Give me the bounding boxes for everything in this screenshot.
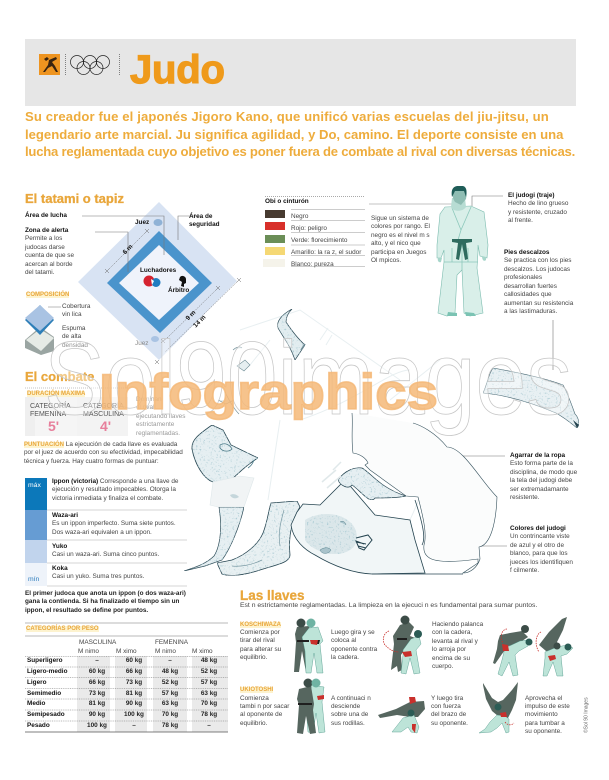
step text: su oponente. [525,728,562,735]
stat: masculina: CATEGORÍA [83,403,124,410]
llaves subtitle: Est n estrictamente reglamentadas. La limpieza en la ejecuci n es fundamental para sumar puntos. [240,602,537,609]
step text: levanta al rival y [432,638,478,645]
weight table: 60 kg [89,668,105,675]
label: juez: Juez [135,219,149,226]
stat: femenina: 5' [48,418,59,434]
step text: lo arroja por [432,646,466,653]
note: judogi: Hecho de lino grueso [508,200,568,207]
duration note: ejecutando llaves [136,413,185,420]
label: 14 m: 14 m [192,314,207,329]
heading: koschiwaza: KOSCHIWAZA [240,622,281,628]
label: area de seguridad: Área de [189,213,212,220]
step text: movimiento [525,711,558,718]
white gi shading [240,310,450,540]
step text: Comienza por [240,629,280,636]
note: colores: jueces los identifiquen [510,559,573,566]
step text: Aprovecha el [525,694,562,702]
belt text: participa en Juegos [371,249,426,256]
weight table: M nimo [78,648,99,655]
intro paragraph: Su creador fue el japonés Jigoro Kano, que unificó varias escuelas del jiu-jitsu, un [25,109,549,124]
weight table: 57 kg [201,679,217,686]
weight table: 81 kg [126,690,142,697]
weight table: Medio [27,700,45,707]
rule note [25,590,186,614]
upper sleeve [278,309,305,360]
step text: Y luego tira [431,694,463,702]
label: max: máx [28,482,41,489]
step text: Haciendo palanca [432,621,483,628]
belt text: colores por rango. El [371,223,430,230]
main judo illustration [184,309,579,575]
label: espuma [62,325,88,349]
puntuacion text: PUNTUACIÓN La ejecución de cada llave es evaluada [24,441,177,448]
score: koka [52,565,144,580]
icon: judo pictogram [39,54,60,75]
weight table: Semimedio [27,690,61,697]
step text [331,629,378,661]
step text: sus rodillas. [331,720,365,727]
grip forearm [338,468,406,500]
step text: con fuerza [431,703,461,710]
watermark: Infographics [99,364,438,420]
white trouser cuff [210,476,254,507]
note: judogi: El judogi (traje) [508,192,555,199]
heading: duracion: DURACIÓN MÁXIMA [27,391,85,397]
belt labels [291,213,362,268]
belt text: alto, y el nico que [371,240,421,247]
stat: femenina: CATEGORÍA [30,403,71,410]
label: zona de alerta [24,227,74,276]
duration note [136,396,186,437]
duration panel [25,388,128,436]
tatami diagram [78,202,241,364]
step text [240,629,281,661]
label: min: mín [28,576,39,583]
label: area de seguridad [189,212,220,228]
score: waza-ari: Dos waza-ari equivalen a un ippon. [52,529,152,536]
step text: para alterar su [240,646,281,653]
credit: ©Sol 90 Images [584,697,590,733]
score: ippon [52,478,178,502]
weight table: Semipesado [27,711,65,718]
belt labels: Negro [291,213,308,220]
heading: el combate: El combate [25,369,94,384]
label: juez lower: Juez [135,340,148,347]
note: agarrar [510,452,577,501]
weight table: – [95,657,99,664]
note: colores: Colores del judogi [510,525,566,532]
label: zona de alerta: Permite a los [25,235,62,242]
composition cubes [25,305,61,355]
label: 9 m: 9 m [185,309,197,322]
note: pies descalzos: a las lastimaduras. [504,308,557,315]
stat: femenina [30,402,71,434]
weight table: 66 kg [126,668,142,675]
label: espuma: densidad [62,342,88,349]
icon: koshiwaza step 1 [294,618,323,673]
step text: del brazo de [431,711,466,718]
stat: masculina: 4' [100,418,111,434]
step text: su oponente. [431,720,468,727]
heading: el tatami: El tatami o tapiz [25,191,124,206]
step text: Comienza [240,694,269,702]
heading: las llaves: Las llaves [240,588,305,603]
step text: encima de su [432,655,470,662]
heading: ukiotoshi: UKIOTOSHI [240,687,273,693]
label: cobertura: vin lica [62,311,82,318]
weight table: 63 kg [201,690,217,697]
belt colours [263,196,452,267]
note: colores [510,525,573,574]
duration note: estrictamente [136,421,174,428]
note: judogi: al frente. [508,217,533,224]
step text: equilibrio. [240,720,267,727]
belt labels: Blanco: pureza [291,261,334,268]
label: espuma: Espuma [62,325,85,332]
weight table: Superligero [27,657,63,664]
knee and thigh [192,425,258,482]
step text: la cadera. [331,654,359,661]
step text: impulso de este [525,703,570,710]
note: pies descalzos [504,249,574,315]
score: ippon: Ippon (victoria) Corresponde a una llave de [52,478,178,485]
step text: con la cadera, [432,629,472,636]
weight table: 52 kg [201,668,217,675]
note: agarrar: Esto forma parte de la [510,460,573,467]
note: pies descalzos: desarrollan fuertes [504,283,557,290]
score: koka: Koka [52,565,68,572]
note: pies descalzos: Pies descalzos [504,249,549,256]
gripping hand [356,535,372,550]
note: pies descalzos: descalzos. Los judocas [504,266,570,273]
step text [432,621,484,670]
belt labels: Rojo: peligro [291,225,327,232]
weight table: 70 kg [162,711,178,718]
title: Judo [130,48,225,92]
belt labels: Amarillo: la ra z, el sudor [291,249,361,256]
label: area de lucha: Área de lucha [25,212,67,219]
front lower leg and foot [217,501,300,575]
weight table: 100 kg [87,722,107,729]
note: colores: Un contrincante viste [510,533,570,540]
weight table: FEMENINA [155,639,188,646]
note: pies descalzos: profesionales [504,274,542,281]
scoring scale [25,478,187,586]
step text: coloca al [331,637,356,644]
intro paragraph [25,109,575,159]
weight table: 60 kg [126,657,142,664]
puntuacion text: por el juez de acuerdo con su efectividad, impecabilidad [24,449,183,456]
duration note: Dominan [136,396,162,403]
note: judogi: y resistente, cruzado [508,209,567,216]
puntuacion text: técnica y fuerza. Hay cuatro formas de puntuar: [24,458,159,465]
weight table: MASCULINA [79,639,116,646]
weight table: – [132,722,136,729]
label: arbitro: Árbitro [168,287,189,294]
weight table: 66 kg [89,679,105,686]
label: area de seguridad: seguridad [189,221,220,228]
label: cobertura [62,303,90,318]
label: zona de alerta: judocas darse [25,244,65,251]
step text [331,694,371,727]
icon: fighters [144,276,160,287]
step text: oponente contra [331,646,377,653]
icon: koshiwaza step 2 [383,616,422,674]
note: pies descalzos: callosidades que [504,291,552,298]
stat: masculina [83,402,124,434]
belt text [371,215,430,264]
step text [240,694,290,727]
weight table: 73 kg [126,679,142,686]
heading: categorias: CATEGORÍAS POR PESO [26,626,99,632]
weight table: – [168,657,172,664]
weight table: Ligero-medio [27,668,67,675]
icon: koshiwaza step 3 [493,625,532,676]
step text: para tumbar a [525,720,565,727]
rule note: gana la contienda. Si ha finalizado el tiempo sin un [25,598,179,605]
step text: tirar del rival [240,637,275,644]
note: agarrar: Agarrar de la ropa [510,452,565,459]
back arm hand [218,347,250,414]
label: 6 m: 6 m [122,243,134,256]
stat: femenina: FEMENINA [30,411,66,418]
note: agarrar: resistente. [510,494,539,501]
label: zona de alerta: cuenta de que se [25,252,74,259]
label: espuma: de alta [62,333,81,340]
score: yuko: Yuko [52,543,67,550]
intro paragraph: lucha reglamentada cuyo objetivo es poner fuera de combate al rival con diversas técnicas. [25,144,575,159]
standing judoka [437,186,488,316]
step text [525,694,570,737]
header band [25,39,576,106]
step text: Luego gira y se [331,629,375,636]
weight table: M ximo [116,648,137,655]
note: agarrar: disciplina, de modo que [510,469,577,476]
weight table: 100 kg [124,711,144,718]
step text [431,694,468,727]
weight table: 81 kg [89,700,105,707]
step text: cuerpo. [432,663,453,670]
note: pies descalzos: aumentan su resistencia [504,300,573,307]
label: cobertura: Cobertura [62,303,90,310]
main gi outline [352,413,497,573]
icon: olympic rings [66,54,120,75]
weight table: 90 kg [126,700,142,707]
weight table: Pesado [27,722,50,729]
belt text: negro es el nivel m s [371,232,430,239]
label: luchadores: Luchadores [140,267,176,274]
step text: sobre una de [331,711,368,718]
weight table: 70 kg [201,700,217,707]
lying body torso [291,480,425,574]
step text: tambi n por sacar [240,703,289,710]
weight table: – [207,722,211,729]
weight table: 78 kg [162,722,178,729]
rule note: ippon, el resultado se define por puntos. [25,607,148,614]
label: zona de alerta: Zona de alerta [25,227,68,234]
note: colores: f cilmente. [510,567,539,574]
score: koka: Casi un yuko. Suma tres puntos. [52,573,144,580]
weight table: M ximo [192,648,213,655]
icon: koshiwaza step 4 [536,617,573,676]
note: agarrar: la tela del judogi debe [510,477,572,484]
heading: obi: Obi o cinturón [265,198,309,205]
weight table: 78 kg [201,711,217,718]
note: judogi [508,192,568,224]
weight table background [25,623,228,732]
icon: ukiotoshi step 2 [378,697,425,733]
icon: lower judge [151,336,159,342]
belt labels: Verde: florecimiento [291,237,347,244]
step text: equilibrio. [240,654,267,661]
note: colores: blanco, para que los [510,550,568,557]
score: waza-ari: Es un ippon imperfecto. Suma siete puntos. [52,520,176,527]
note: pies descalzos: Se practica con los pies [504,257,572,264]
weight table: 48 kg [162,668,178,675]
intro paragraph: legendario arte marcial. Ju significa agilidad, y Do, camino. El deporte consiste en una [25,127,563,142]
puntuacion text [24,440,183,465]
weight table: 48 kg [201,657,217,664]
icon: ukiotoshi step 3 [479,682,518,733]
weight table: 57 kg [162,690,178,697]
belt text: Ol mpicos. [371,257,401,264]
weight table: 63 kg [162,700,178,707]
score: yuko: Casi un waza-ari. Suma cinco puntos. [52,551,159,558]
duration note: el rival [136,404,154,411]
duration note: reglamentadas. [136,430,180,437]
weight table: M nimo [155,648,176,655]
belt text: Sigue un sistema de [371,215,429,222]
weight table [27,639,217,729]
icon: referee [179,276,186,287]
note: colores: de azul y el otro de [510,542,564,549]
score: yuko [52,543,159,558]
rear lower leg [184,507,244,571]
note: agarrar: ser extremadamante [510,486,569,493]
icon: upper judge [154,219,162,226]
icon: ukiotoshi step 1 [297,678,325,734]
step text: desciende [331,703,360,710]
rule note: El primer judoca que anota un ippon (o dos waza-ari) [25,590,186,597]
step text: A continuaci n [331,694,371,702]
heading: composicion: COMPOSICIÓN [26,292,69,298]
label: zona de alerta: acercan al borde [25,261,73,268]
weight table: 90 kg [89,711,105,718]
annotation lines [362,196,553,546]
stat: masculina: MASCULINA [83,411,124,418]
score: waza-ari: Waza-ari [52,512,78,519]
weight table: Ligero [27,679,47,686]
step text: al oponente de [240,711,282,718]
score: waza-ari [52,512,176,536]
weight table: 52 kg [162,679,178,686]
weight table: 73 kg [89,690,105,697]
score: ippon: ejecución y resultado impecables. Otorga la [52,486,176,493]
raised leg [483,368,579,428]
score: ippon: victoria inmediata y finaliza el combate. [52,495,163,502]
label: zona de alerta: del tatami. [25,269,54,276]
